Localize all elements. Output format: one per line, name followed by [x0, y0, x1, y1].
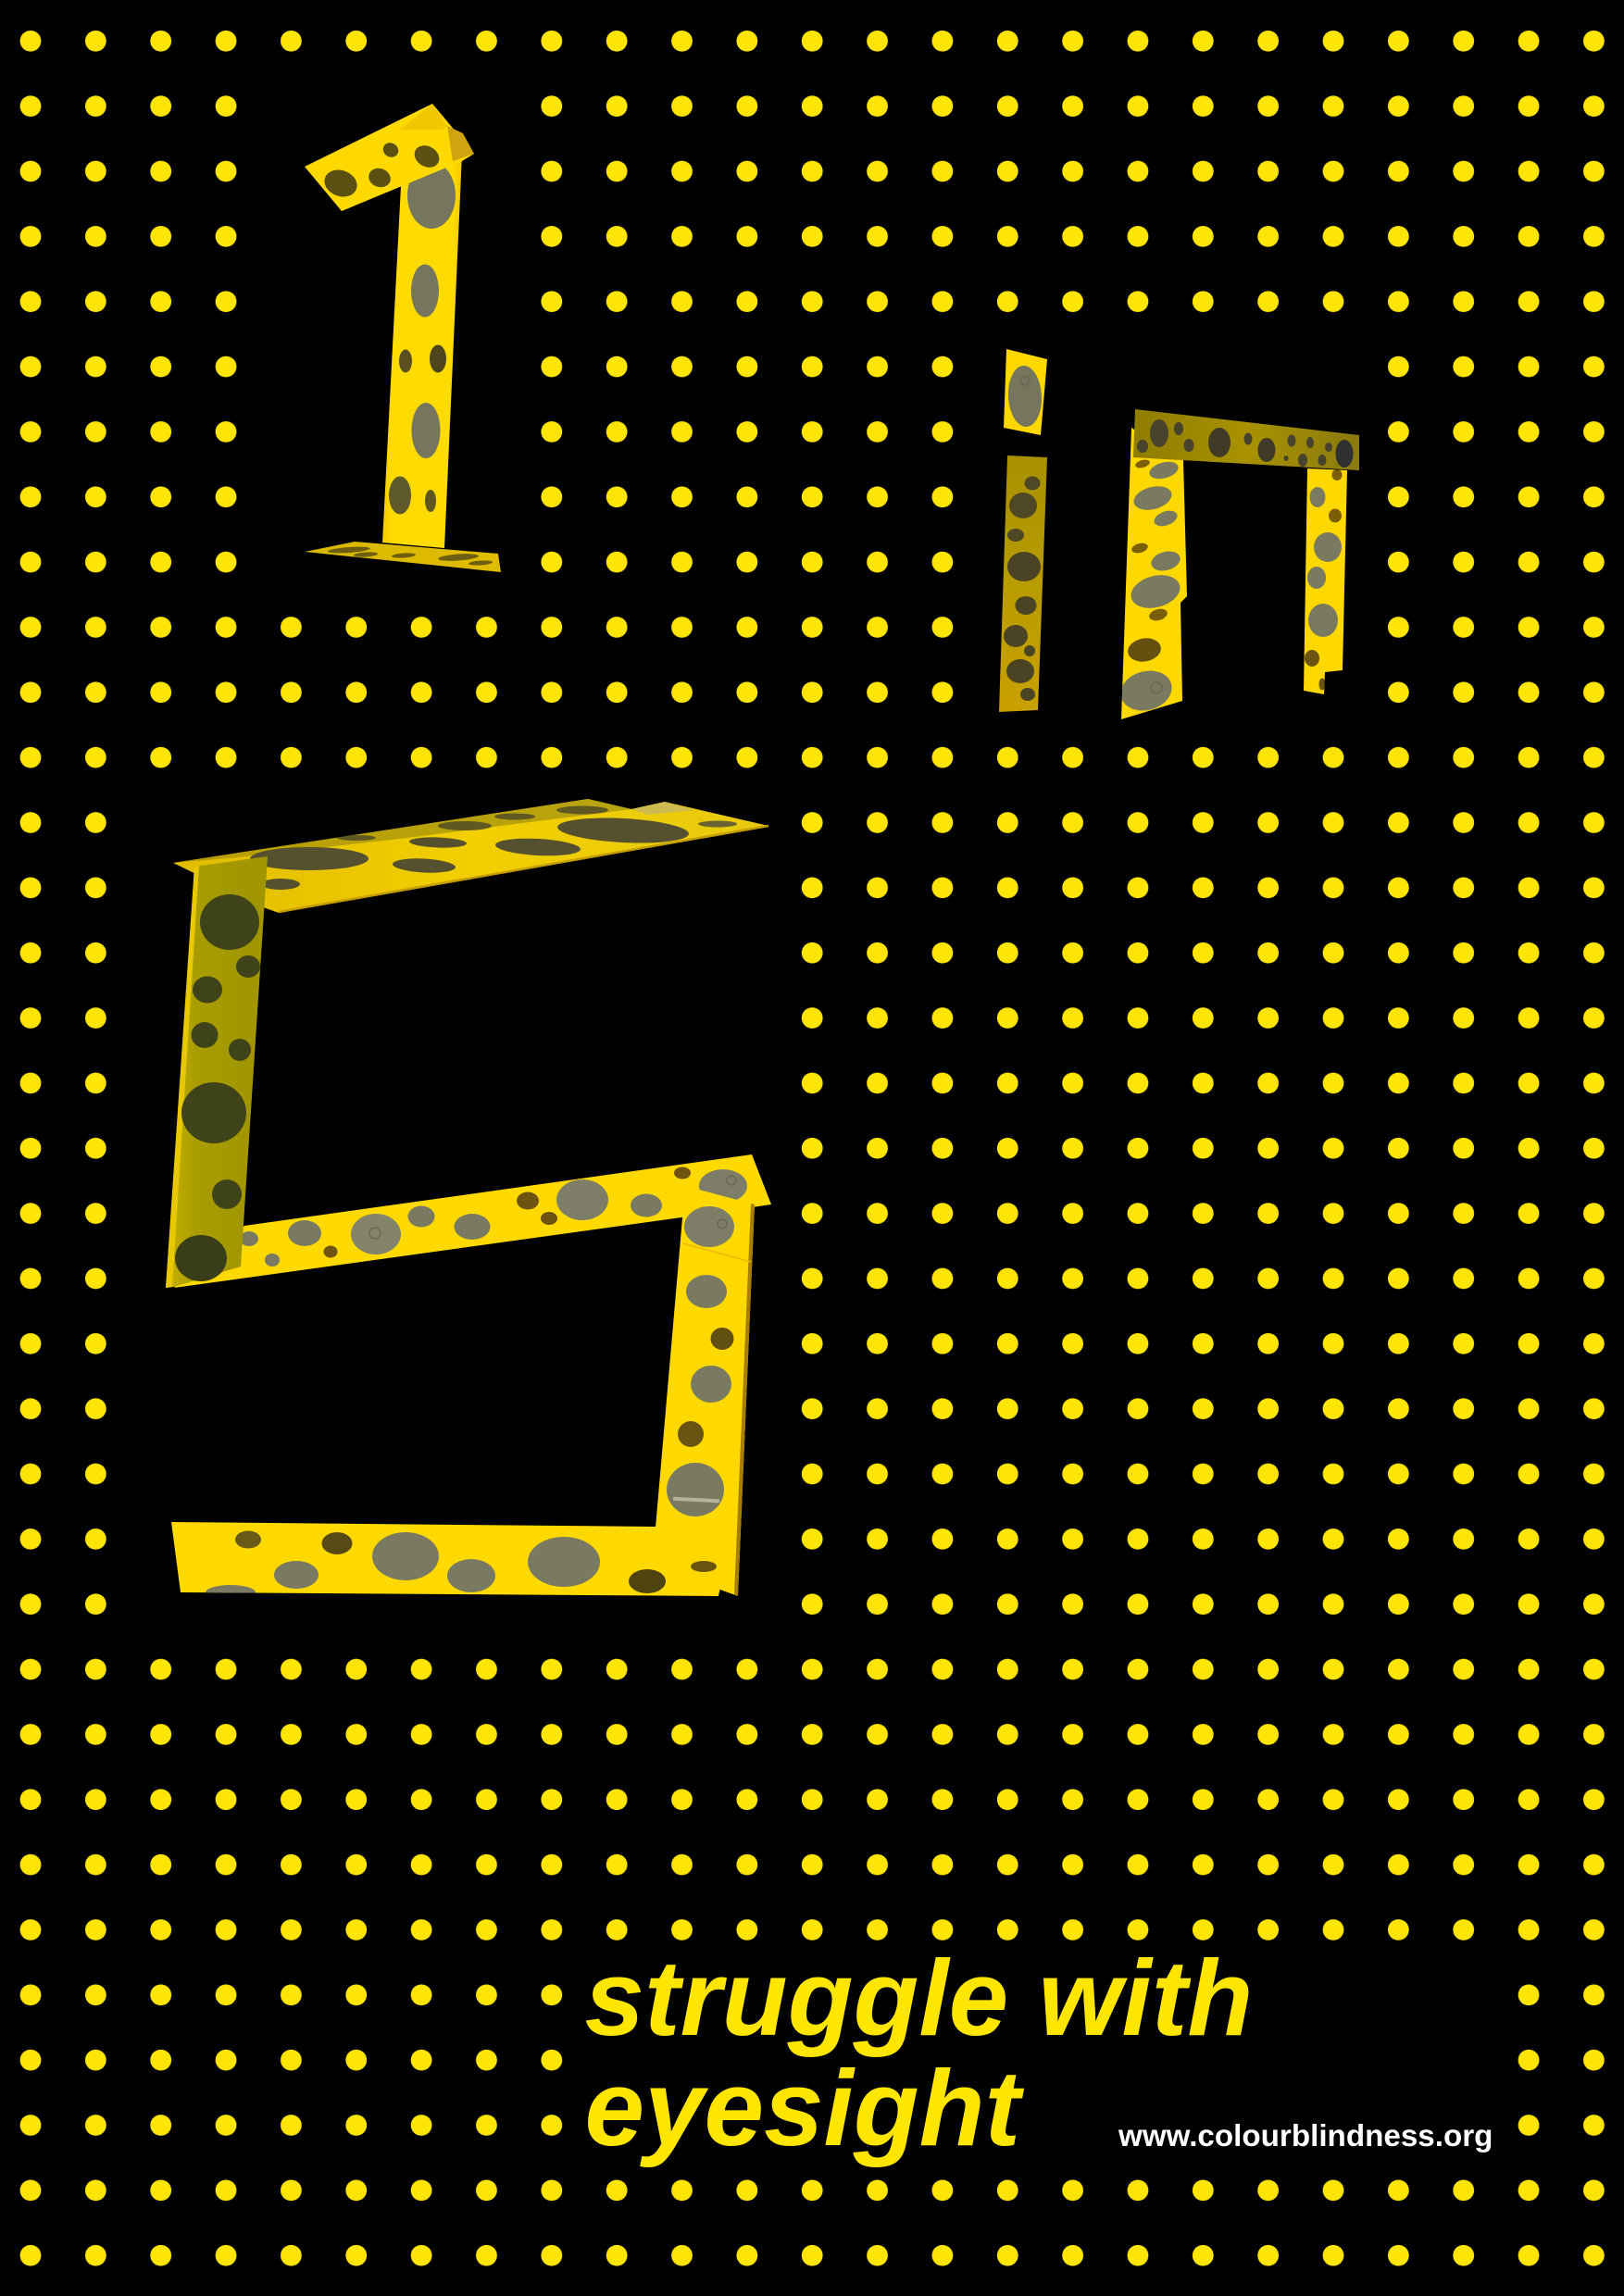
website url: www.colourblindness.org	[1118, 2119, 1493, 2153]
numeral 5 top band	[173, 799, 768, 913]
numeral 1 flag	[305, 104, 474, 211]
numeral 5 bottom band	[171, 1522, 726, 1600]
numeral 1 stem	[382, 133, 463, 548]
numeral 5 left vertical	[166, 856, 268, 1288]
numeral 5 middle band	[174, 1154, 771, 1288]
numeral 1 base	[305, 542, 501, 572]
letter n right leg	[1304, 468, 1347, 694]
letter i stem	[999, 455, 1047, 712]
headline: struggle with eyesight: eyesight	[585, 2048, 1024, 2168]
letter i dot	[1004, 349, 1047, 435]
letter n top bar	[1133, 409, 1359, 470]
numeral 5 right vertical	[656, 1186, 755, 1596]
numeral 5	[166, 799, 771, 1600]
word in	[999, 349, 1359, 719]
letter n left leg	[1117, 428, 1187, 719]
numeral 1	[305, 104, 501, 572]
headline: struggle with eyesight	[585, 1938, 1253, 2168]
headline: struggle with eyesight: struggle with	[585, 1938, 1253, 2058]
